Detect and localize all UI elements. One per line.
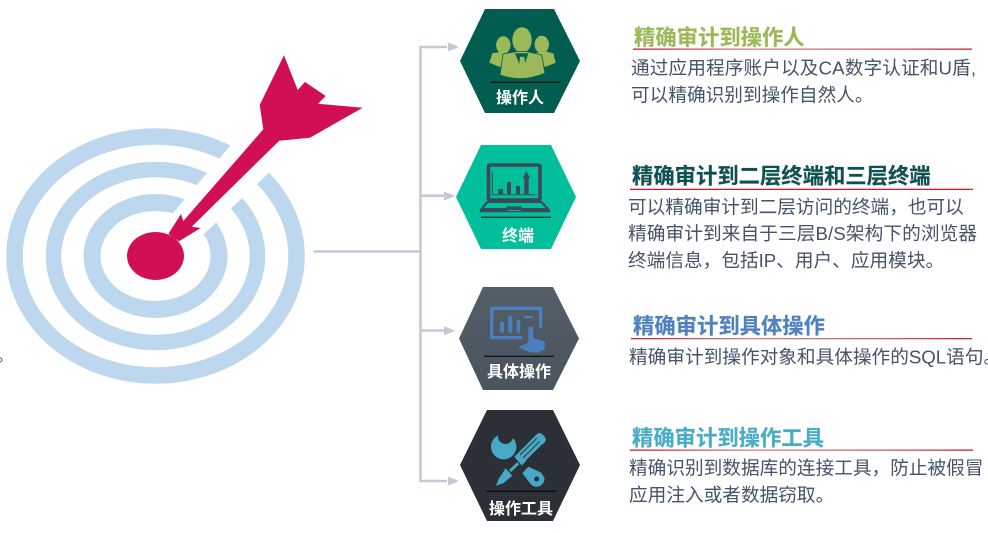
label: 具体操作	[487, 363, 551, 381]
description: 可以精确识别到操作自然人。	[631, 84, 874, 106]
arrowhead: tools	[448, 476, 459, 486]
heading: 精确审计到操作工具	[632, 426, 824, 450]
arrowhead: terminal	[444, 192, 456, 200]
icon: tools	[491, 429, 546, 487]
hexagon: 操作人	[460, 9, 580, 113]
description: 应用注入或者数据窃取。	[629, 484, 834, 506]
arrow	[168, 55, 363, 241]
description: 精确识别到数据库的连接工具，防止被假冒	[629, 458, 983, 478]
hexagon: 终端	[456, 145, 576, 249]
label: 操作工具	[489, 500, 553, 518]
stray punctuation mark	[0, 358, 2, 362]
hexagon: 具体操作	[459, 287, 579, 390]
target rings	[14, 136, 296, 376]
heading: 精确审计到操作人	[634, 25, 805, 50]
bullseye	[127, 232, 184, 280]
hexagon: 操作工具	[460, 410, 580, 521]
label: 操作人	[496, 89, 544, 107]
connector lines	[314, 42, 459, 486]
arrowhead: specific operation	[444, 326, 456, 335]
text block: terminal	[628, 164, 977, 271]
text block: tools	[629, 426, 983, 506]
icon: laptop	[480, 165, 550, 212]
description: 终端信息，包括IP、用户、应用模块。	[628, 250, 944, 271]
description: 可以精确审计到二层访问的终端，也可以	[628, 196, 964, 218]
label: 终端	[502, 227, 534, 245]
description	[631, 58, 976, 106]
icon: touch chart	[492, 308, 545, 352]
text block: specific operation	[629, 314, 988, 368]
icon: people	[489, 27, 556, 79]
description: 通过应用程序账户以及CA数字认证和U盾,	[631, 58, 976, 78]
heading: 精确审计到二层终端和三层终端	[632, 164, 931, 188]
description	[629, 458, 983, 506]
heading: 精确审计到具体操作	[633, 314, 825, 338]
description	[628, 196, 977, 271]
arrowhead: operator	[448, 42, 459, 52]
description: 精确审计到来自于三层B/S架构下的浏览器	[628, 223, 977, 244]
text block: operator	[631, 25, 976, 106]
target with arrow	[14, 55, 363, 376]
